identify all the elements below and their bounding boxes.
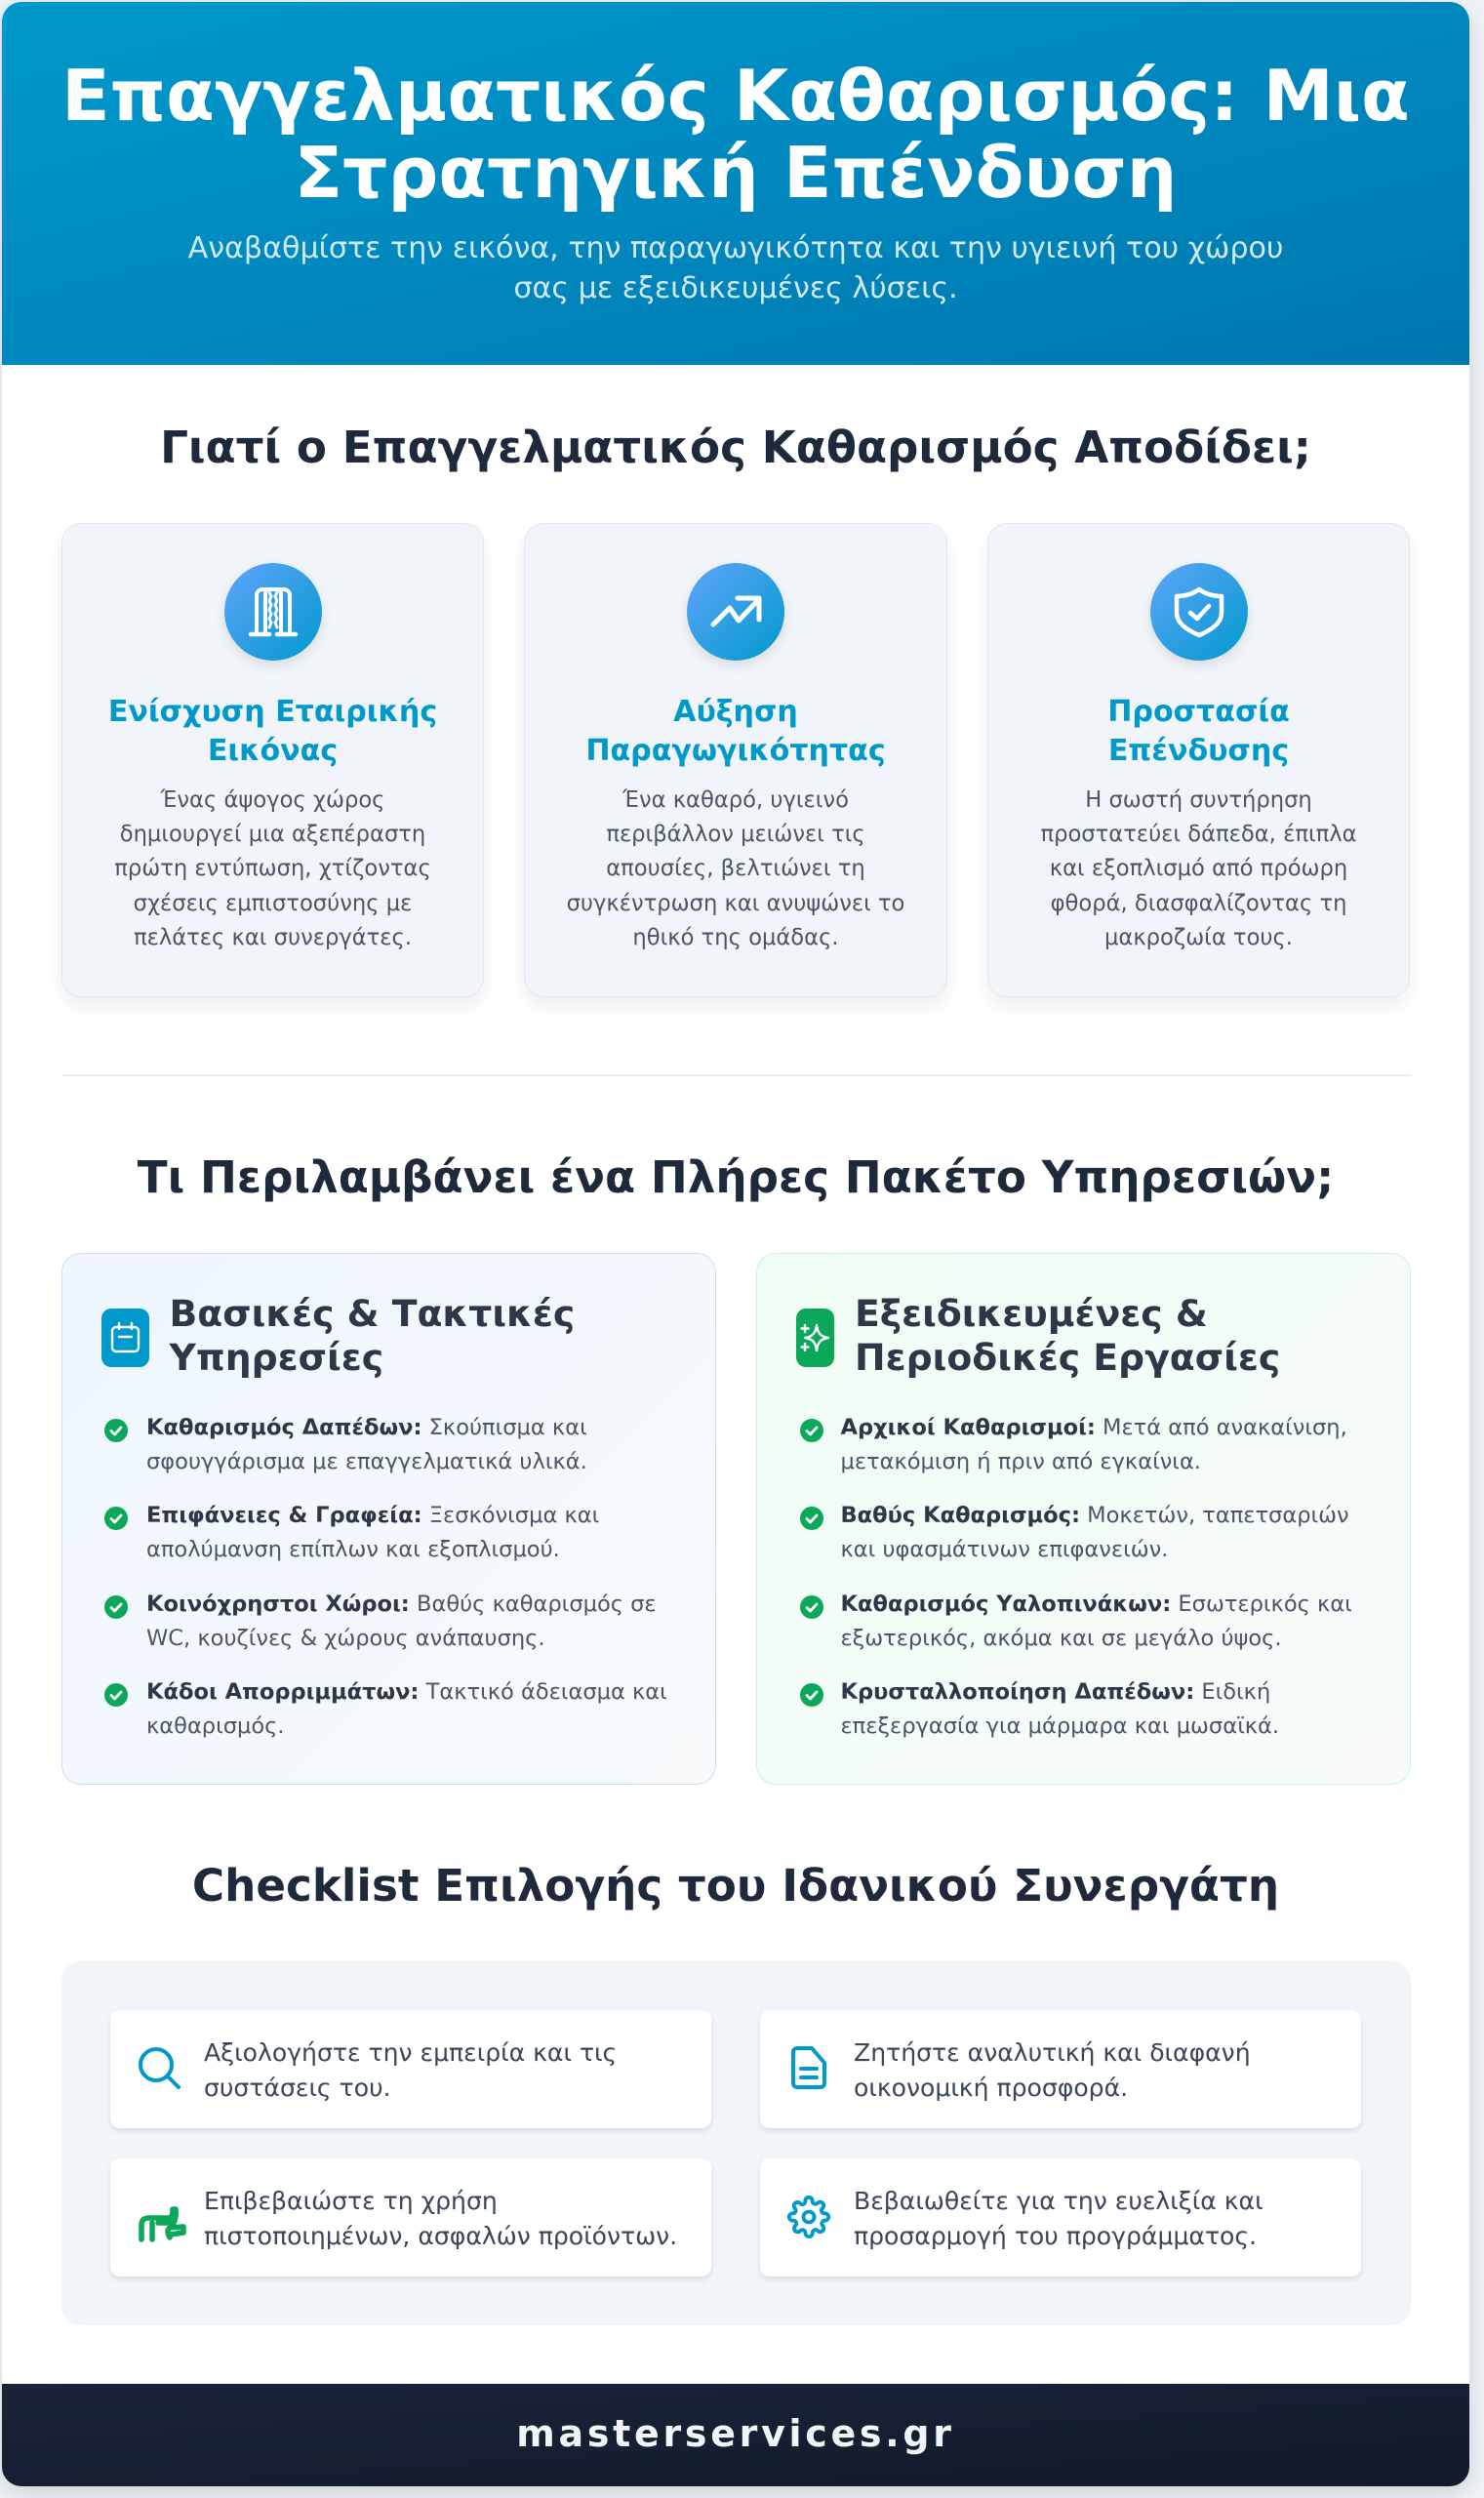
card title: Εικόνας	[208, 734, 338, 767]
panel title	[855, 1292, 1280, 1378]
website: masterservices.gr	[516, 2412, 955, 2455]
item text: προσαρμογή του προγράμματος.	[854, 2221, 1257, 2250]
main title: Επαγγελματικός Καθαρισμός: Μια	[61, 55, 1410, 137]
panel: specialized services	[756, 1253, 1411, 1785]
card text	[114, 787, 431, 950]
item text	[854, 2038, 1251, 2102]
check icon	[800, 1595, 823, 1619]
list item	[841, 1503, 1349, 1562]
list item: WC, κουζίνες & χώρους ανάπαυσης.	[146, 1626, 545, 1651]
list item	[146, 1415, 587, 1474]
card title	[1107, 695, 1290, 767]
icon: calendar	[101, 1309, 149, 1367]
icon: gear	[787, 2196, 830, 2238]
card text: περιβάλλον μειώνει τις	[606, 822, 865, 847]
card: corporate image	[61, 523, 484, 997]
panel title	[169, 1292, 575, 1378]
list item: Κάδοι Απορριμμάτων: Τακτικό άδειασμα και	[146, 1679, 667, 1705]
item text: οικονομική προσφορά.	[854, 2073, 1128, 2102]
panel: basic services	[61, 1253, 716, 1785]
check icon	[104, 1595, 128, 1619]
card text: Η σωστή συντήρηση	[1085, 787, 1312, 813]
check icon	[104, 1507, 128, 1530]
heading: partner checklist: Checklist Επιλογής του Ιδανικού Συνεργάτη	[192, 1860, 1279, 1912]
panel title: Υπηρεσίες	[170, 1335, 383, 1378]
card title	[108, 695, 437, 767]
card title	[585, 695, 886, 767]
icon: trending up	[687, 563, 784, 661]
list item: σφουγγάρισμα με επαγγελματικά υλικά.	[146, 1449, 587, 1474]
panel title: Εξειδικευμένες &	[855, 1292, 1208, 1335]
list item: επεξεργασία για μάρμαρα και μωσαϊκά.	[841, 1713, 1279, 1739]
list item: εξωτερικός, ακόμα και σε μεγάλο ύψος.	[841, 1626, 1282, 1651]
item text: Αξιολογήστε την εμπειρία και τις	[204, 2038, 617, 2067]
card text: Ένα καθαρό, υγιεινό	[622, 787, 849, 813]
card text: σχέσεις εμπιστοσύνης με	[134, 891, 412, 916]
list item	[146, 1503, 599, 1562]
footer	[2, 2384, 1469, 2486]
heading: why it pays: Γιατί ο Επαγγελματικός Καθαρισμός Αποδίδει;	[160, 422, 1311, 473]
item text: πιστοποιημένων, ασφαλών προϊόντων.	[204, 2221, 677, 2250]
item text: Επιβεβαιώστε τη χρήση	[204, 2187, 498, 2215]
list item: Αρχικοί Καθαρισμοί: Μετά από ανακαίνιση,	[841, 1415, 1347, 1440]
item text	[204, 2038, 617, 2102]
panel title: Περιοδικές Εργασίες	[855, 1335, 1280, 1378]
check icon	[104, 1683, 128, 1707]
icon: document	[791, 2046, 826, 2089]
card text: πρώτη εντύπωση, χτίζοντας	[114, 856, 431, 881]
card text	[567, 787, 904, 950]
heading: package contents: Τι Περιλαμβάνει ένα Πλήρες Πακέτο Υπηρεσιών;	[138, 1151, 1334, 1203]
card title: Επένδυσης	[1108, 734, 1289, 767]
item text: Ζητήστε αναλυτική και διαφανή	[854, 2038, 1251, 2067]
checklist item: quote	[760, 2010, 1361, 2128]
list item: και υφασμάτινων επιφανειών.	[841, 1537, 1168, 1562]
list item: Κρυσταλλοποίηση Δαπέδων: Ειδική	[841, 1679, 1270, 1705]
checklist item: certified products	[110, 2158, 711, 2276]
card: productivity	[524, 523, 947, 997]
card text: δημιουργεί μια αξεπέραστη	[120, 822, 425, 847]
checklist item: flexibility	[760, 2158, 1361, 2276]
icon: shield check	[1149, 563, 1247, 661]
panel title: Βασικές & Τακτικές	[170, 1292, 575, 1335]
list item	[841, 1415, 1347, 1474]
card text: συγκέντρωση και ανυψώνει το	[567, 891, 904, 916]
card: investment protection	[987, 523, 1410, 997]
card text: και εξοπλισμό από πρόωρη	[1050, 856, 1347, 881]
list item: καθαρισμός.	[146, 1713, 285, 1739]
icon: building	[224, 563, 322, 661]
card text: Ένας άψογος χώρος	[161, 787, 384, 813]
icon: hand	[139, 2206, 186, 2242]
icon: sparkles	[796, 1309, 834, 1367]
subtitle: σας με εξειδικευμένες λύσεις.	[513, 271, 958, 304]
card text: μακροζωία τους.	[1104, 925, 1293, 950]
list item: απολύμανση επίπλων και εξοπλισμού.	[146, 1537, 560, 1562]
checklist item: experience	[110, 2010, 711, 2128]
card text: φθορά, διασφαλίζοντας τη	[1051, 891, 1346, 916]
list item	[146, 1591, 657, 1651]
icon: search	[139, 2047, 180, 2089]
card text: απουσίες, βελτιώνει τη	[606, 856, 865, 881]
subtitle: Αναβαθμίστε την εικόνα, την παραγωγικότητα και την υγιεινή του χώρου	[188, 230, 1283, 265]
list item	[146, 1679, 667, 1739]
header banner	[2, 2, 1469, 365]
check icon	[800, 1507, 823, 1530]
list item: Επιφάνειες & Γραφεία: Ξεσκόνισμα και	[146, 1503, 599, 1528]
item text: συστάσεις του.	[204, 2073, 391, 2102]
list item: Βαθύς Καθαρισμός: Μοκετών, ταπετσαριών	[841, 1503, 1349, 1528]
card title: Ενίσχυση Εταιρικής	[108, 695, 437, 728]
card title: Παραγωγικότητας	[585, 734, 886, 767]
card title: Αύξηση	[673, 695, 798, 728]
check icon	[800, 1683, 823, 1707]
check icon	[104, 1419, 128, 1442]
main title: Στρατηγική Επένδυση	[295, 133, 1177, 215]
subtitle	[187, 230, 1283, 304]
main title	[61, 55, 1410, 215]
item text: Βεβαιωθείτε για την ευελιξία και	[854, 2187, 1263, 2215]
list item: Κοινόχρηστοι Χώροι: Βαθύς καθαρισμός σε	[146, 1591, 657, 1616]
card text	[1040, 787, 1357, 950]
item text	[854, 2187, 1263, 2250]
item text	[204, 2187, 677, 2250]
card text: ηθικό της ομάδας.	[632, 925, 839, 950]
list item	[841, 1679, 1279, 1739]
list item: Καθαρισμός Δαπέδων: Σκούπισμα και	[146, 1415, 587, 1440]
card text: πελάτες και συνεργάτες.	[134, 925, 412, 950]
check icon	[800, 1419, 823, 1442]
list item	[841, 1591, 1352, 1651]
card title: Προστασία	[1107, 695, 1290, 728]
panel: checklist	[61, 1961, 1411, 2325]
list item: Καθαρισμός Υαλοπινάκων: Εσωτερικός και	[841, 1591, 1352, 1616]
list item: μετακόμιση ή πριν από εγκαίνια.	[841, 1449, 1201, 1474]
card text: προστατεύει δάπεδα, έπιπλα	[1040, 822, 1357, 847]
